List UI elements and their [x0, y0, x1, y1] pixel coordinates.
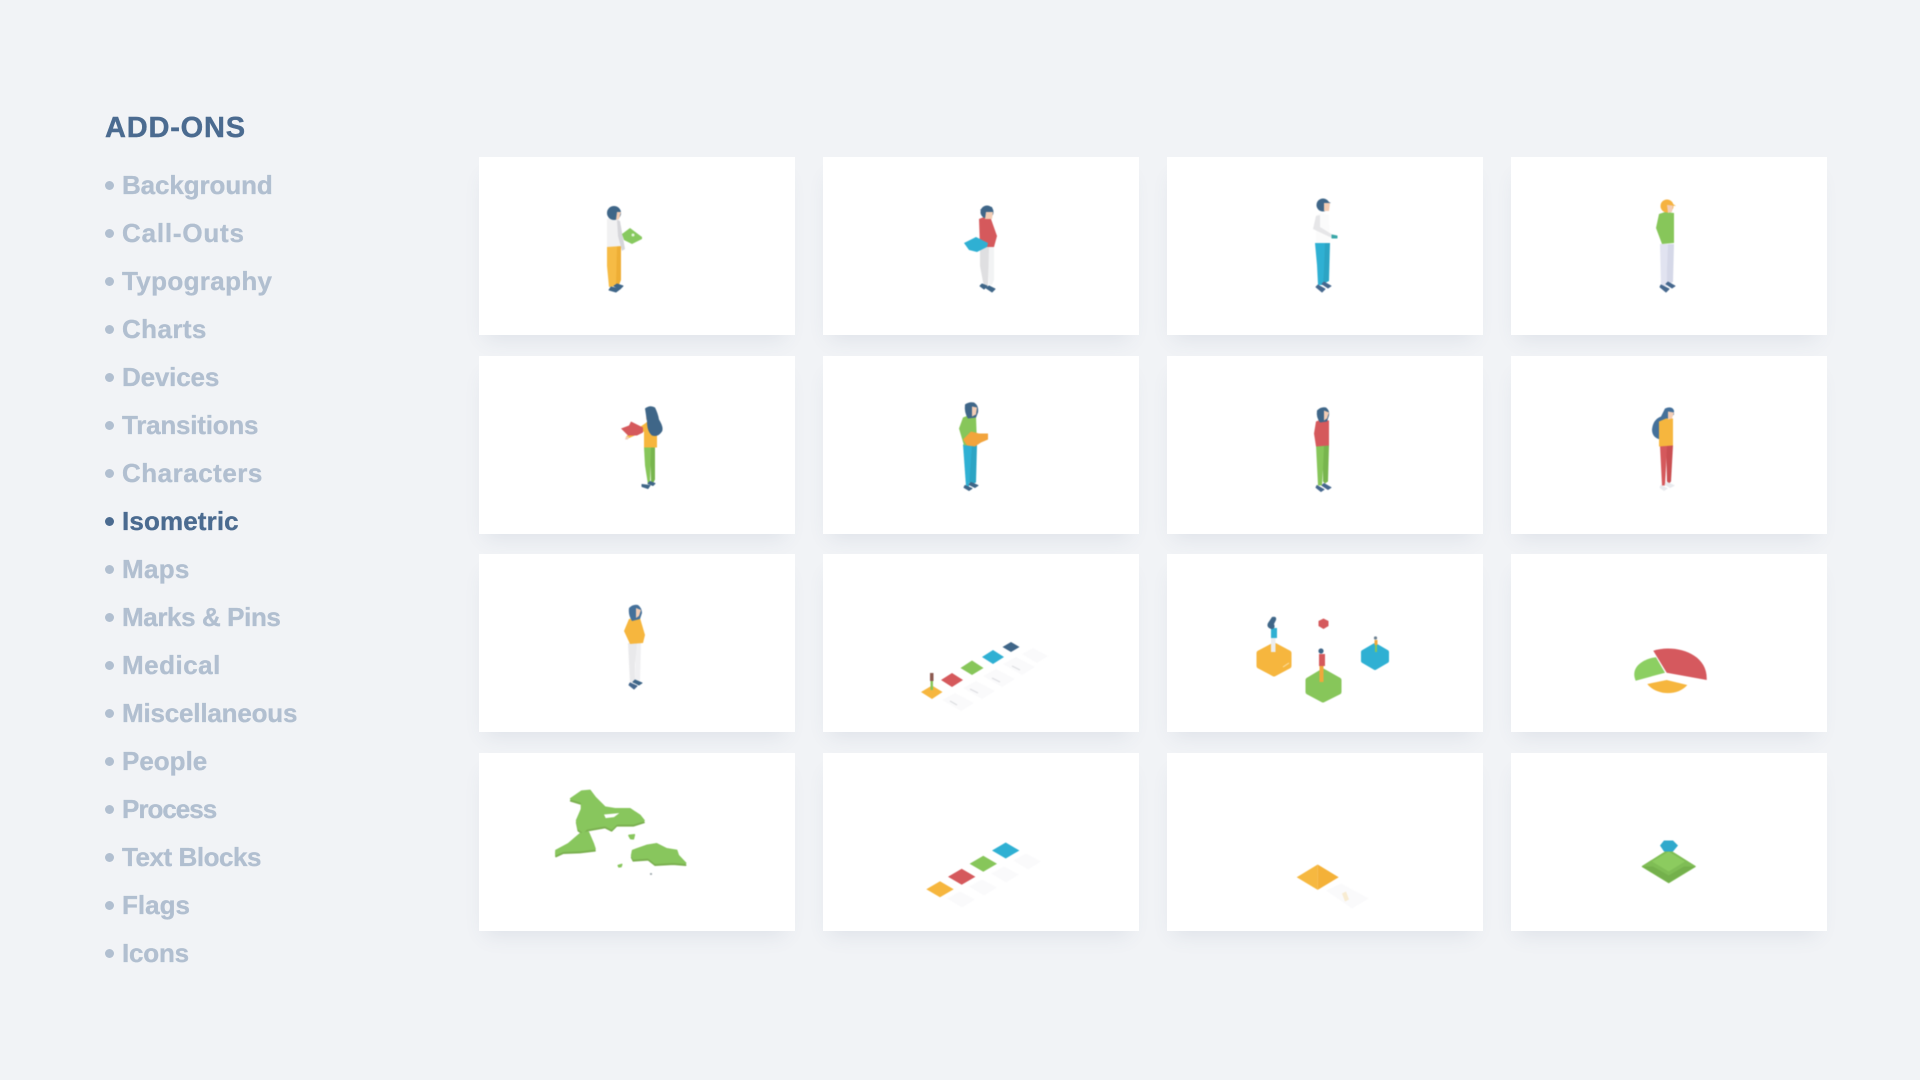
panel: man with teal phone	[1167, 157, 1483, 335]
menu item: Characters	[122, 458, 263, 488]
menu item: Icons	[122, 938, 189, 968]
plate mark	[1342, 891, 1349, 901]
green slice	[1634, 657, 1665, 681]
panel: woman with red puzzle piece	[479, 356, 795, 534]
person on yellow hexagon	[1267, 617, 1277, 652]
panel: isometric green map	[479, 752, 795, 930]
green pyramid	[1642, 850, 1695, 882]
menu item: Call-Outs	[122, 218, 245, 248]
yellow hexagon	[1259, 645, 1289, 674]
map land	[556, 790, 686, 866]
menu item: active: Isometric	[122, 506, 239, 536]
panel: isometric four-step pyramids	[823, 752, 1139, 930]
blue hexagon	[1363, 645, 1387, 668]
icon: green puzzle	[622, 228, 642, 244]
heading: ADD-ONS: ADD-ONS	[105, 112, 246, 144]
menu item: Maps	[122, 554, 190, 584]
menu item: Flags	[122, 890, 190, 920]
panel: isometric pie chart	[1511, 554, 1827, 732]
text plate	[1326, 883, 1369, 908]
menu item: Charts	[122, 314, 207, 344]
blue cap	[1660, 840, 1678, 851]
panel: man with blue puzzle piece	[823, 157, 1139, 335]
small person on yellow tile	[930, 673, 934, 690]
menu item: Devices	[122, 362, 219, 392]
menu item: Medical	[122, 650, 221, 680]
menu item: Text Blocks	[122, 842, 261, 872]
icon: blue puzzle	[964, 237, 988, 252]
yellow pyramid	[1297, 864, 1339, 889]
menu item: People	[122, 746, 207, 776]
panel: man with green puzzle piece	[479, 157, 795, 335]
isometric tiles	[921, 642, 1020, 699]
green hexagon	[1308, 671, 1339, 700]
panel: isometric five-step process	[823, 554, 1139, 732]
menu item: Miscellaneous	[122, 698, 297, 728]
sidebar: add-ons menu	[105, 112, 297, 968]
menu item: Typography	[122, 266, 272, 296]
panel: woman in red sweater	[1167, 356, 1483, 534]
panel: woman in yellow sweater and white trousers	[479, 554, 795, 732]
red slice	[1653, 648, 1707, 680]
panel: isometric single pyramid	[1167, 752, 1483, 930]
icon: red puzzle	[621, 421, 643, 435]
panel: man in green sweater	[1511, 157, 1827, 335]
person on blue hexagon	[1374, 636, 1378, 652]
icon: orange puzzle	[963, 431, 988, 446]
panel: isometric green stepped pyramid	[1511, 752, 1827, 930]
panel: woman in yellow sweater	[1511, 356, 1827, 534]
menu item: Marks & Pins	[122, 602, 280, 632]
map shadow	[556, 792, 686, 865]
menu item: Background	[122, 170, 273, 200]
panel: woman with orange puzzle piece	[823, 356, 1139, 534]
pyramid tiles	[926, 842, 1019, 897]
panel: isometric hexagon blocks	[1167, 554, 1483, 732]
menu item: Process	[122, 794, 216, 824]
small red hexagon	[1318, 618, 1328, 629]
text plates	[942, 648, 1048, 711]
menu item: Transitions	[122, 410, 258, 440]
text plates	[947, 853, 1041, 907]
yellow slice	[1647, 680, 1687, 693]
person on green hexagon	[1318, 648, 1325, 682]
